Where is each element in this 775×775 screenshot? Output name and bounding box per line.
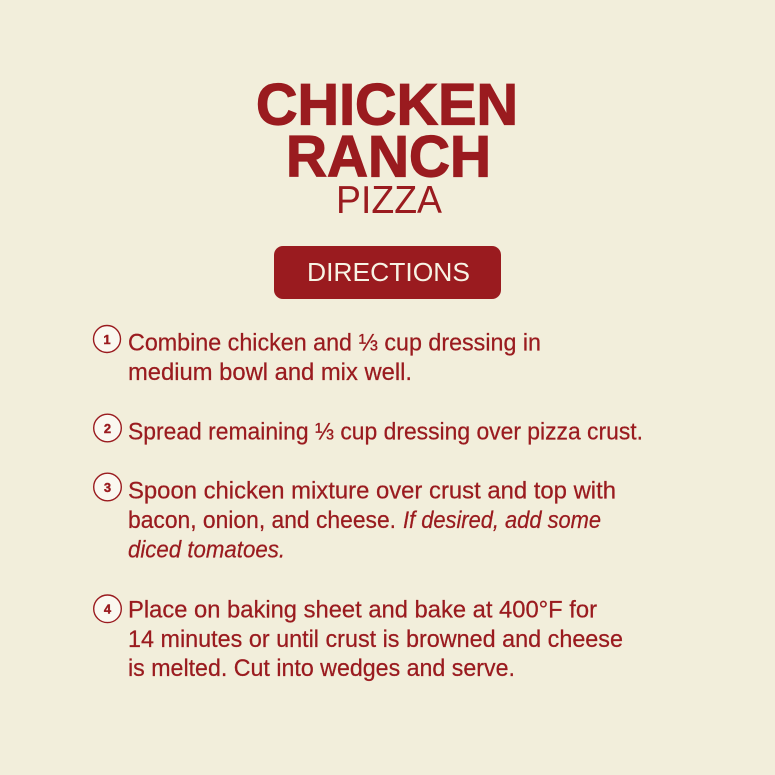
step 1 text: medium bowl and mix well. bbox=[128, 359, 412, 386]
step 1 text bbox=[128, 330, 541, 386]
step 4 text: Place on baking sheet and bake at 400°F for bbox=[128, 596, 597, 624]
step 4 bbox=[94, 595, 623, 682]
step 1 number icon bbox=[94, 326, 120, 352]
step 4 number icon: 4 bbox=[104, 602, 112, 616]
step 3 text bbox=[128, 478, 616, 564]
step 4 number icon bbox=[94, 595, 121, 623]
step 3 number icon bbox=[94, 473, 121, 501]
title: RANCH bbox=[286, 124, 491, 190]
directions badge: DIRECTIONS bbox=[307, 259, 470, 287]
title: PIZZA bbox=[336, 179, 442, 222]
step 2 number icon bbox=[94, 414, 121, 442]
step 4 text bbox=[128, 596, 623, 682]
step 3 bbox=[94, 473, 616, 564]
title: CHICKEN bbox=[256, 72, 518, 138]
step 4 text: is melted. Cut into wedges and serve. bbox=[128, 655, 515, 682]
step 4 text: 14 minutes or until crust is browned and cheese bbox=[128, 626, 623, 653]
step 3 text: If desired, add some bbox=[403, 507, 601, 534]
step 2 text: Spread remaining ⅓ cup dressing over pizza crust. bbox=[128, 418, 643, 446]
step 2 bbox=[94, 414, 643, 446]
step 3 number icon: 3 bbox=[104, 480, 111, 495]
step 2 number icon: 2 bbox=[104, 421, 111, 436]
step 3 text: Spoon chicken mixture over crust and top with bbox=[128, 478, 616, 504]
step 1 number icon: 1 bbox=[103, 332, 111, 347]
title bbox=[256, 72, 518, 222]
step 1 text: Combine chicken and ⅓ cup dressing in bbox=[128, 330, 541, 356]
step 1 bbox=[94, 326, 541, 386]
step 3 text: bacon, onion, and cheese. bbox=[128, 507, 396, 534]
directions badge bbox=[274, 246, 501, 299]
step 3 text: diced tomatoes. bbox=[128, 536, 285, 564]
